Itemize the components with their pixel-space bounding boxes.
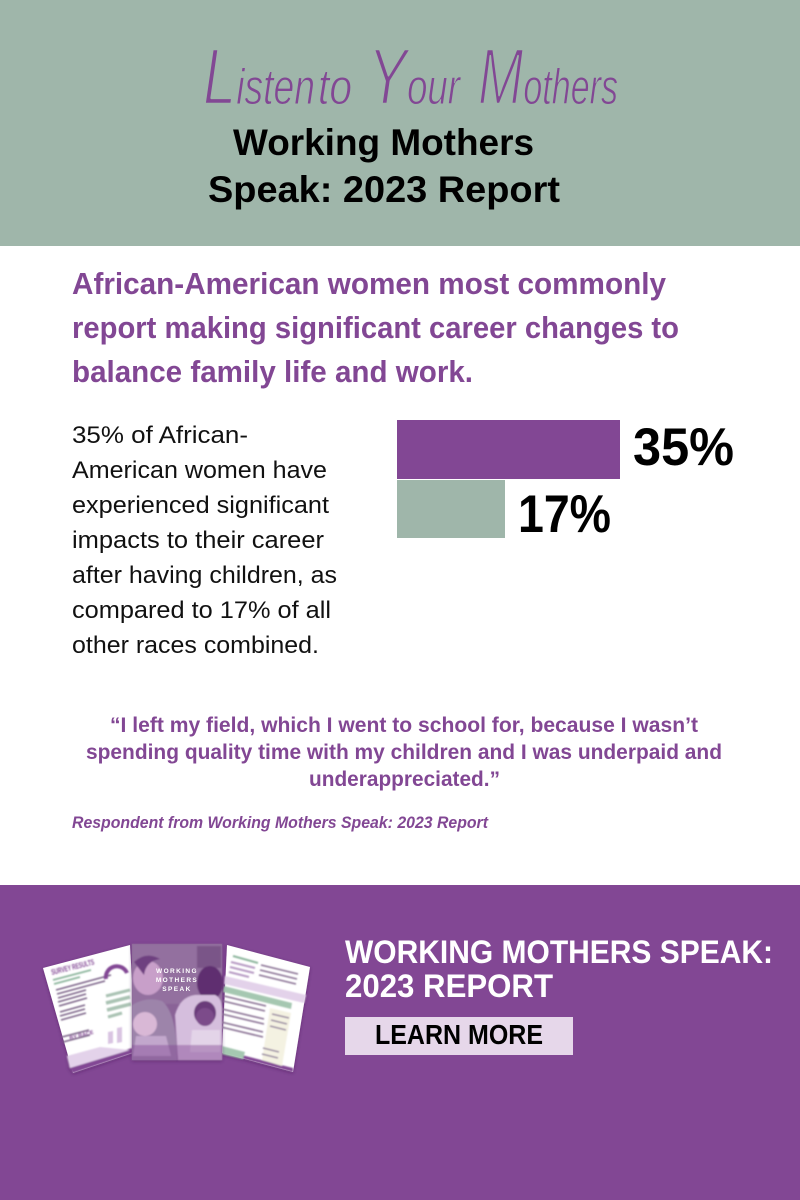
CTA heading: [345, 934, 773, 1004]
heading: report making significant career changes to: [72, 310, 679, 345]
learn more button: [345, 1017, 573, 1055]
left report page: SURVEY RESULTS: [50, 957, 96, 977]
script title: to: [318, 59, 352, 115]
center report cover: [132, 944, 223, 1060]
cover title: WORKING: [156, 968, 198, 975]
panel: call to action: [0, 885, 800, 1200]
panel: header band: [0, 0, 800, 246]
cover title: [156, 968, 198, 993]
body text: experienced significant: [72, 492, 329, 519]
bar: African-American women 35%: [397, 418, 734, 479]
report title: Speak: 2023 Report: [208, 169, 560, 210]
quote: [86, 714, 722, 791]
report title: [208, 122, 560, 210]
body text: after having children, as: [72, 562, 337, 589]
quote attribution: Respondent from Working Mothers Speak: 2023 Report: [72, 813, 489, 832]
left report page: BY RACE: [69, 1030, 95, 1042]
CTA heading: WORKING MOTHERS SPEAK:: [345, 934, 773, 970]
report thumbnails: [43, 944, 310, 1073]
script title: Listen: [203, 32, 315, 121]
script title: [203, 32, 618, 121]
script title: Mothers: [478, 32, 618, 121]
cover title: SPEAK: [162, 986, 192, 993]
cover title: MOTHERS: [156, 977, 198, 984]
learn more button: LEARN MORE: [375, 1019, 543, 1050]
body text: compared to 17% of all: [72, 597, 331, 624]
left report page: [43, 945, 136, 1073]
body text: 35% of African-: [72, 422, 248, 449]
bar: all other races 17%: [397, 480, 611, 544]
quote: underappreciated.”: [309, 768, 500, 791]
report title: Working Mothers: [233, 122, 534, 163]
babies: [194, 1001, 216, 1025]
body text: [72, 422, 337, 659]
body text: American women have: [72, 457, 327, 484]
script title: Your: [368, 32, 462, 121]
left mother: [133, 961, 163, 995]
bar chart: [397, 418, 734, 544]
quote: spending quality time with my children and I was underpaid and: [86, 741, 722, 764]
heading: African-American women most commonly: [72, 266, 667, 301]
quote: “I left my field, which I went to school for, because I wasn’t: [110, 714, 698, 737]
CTA heading: 2023 REPORT: [345, 968, 553, 1004]
bar: African-American women 35%: 35%: [633, 418, 734, 477]
right mother: [197, 966, 223, 1000]
heading: [72, 266, 679, 389]
heading: balance family life and work.: [72, 354, 473, 389]
bar: all other races 17%: 17%: [518, 485, 611, 544]
body text: other races combined.: [72, 632, 319, 659]
right report page: [221, 945, 310, 1072]
body text: impacts to their career: [72, 527, 324, 554]
